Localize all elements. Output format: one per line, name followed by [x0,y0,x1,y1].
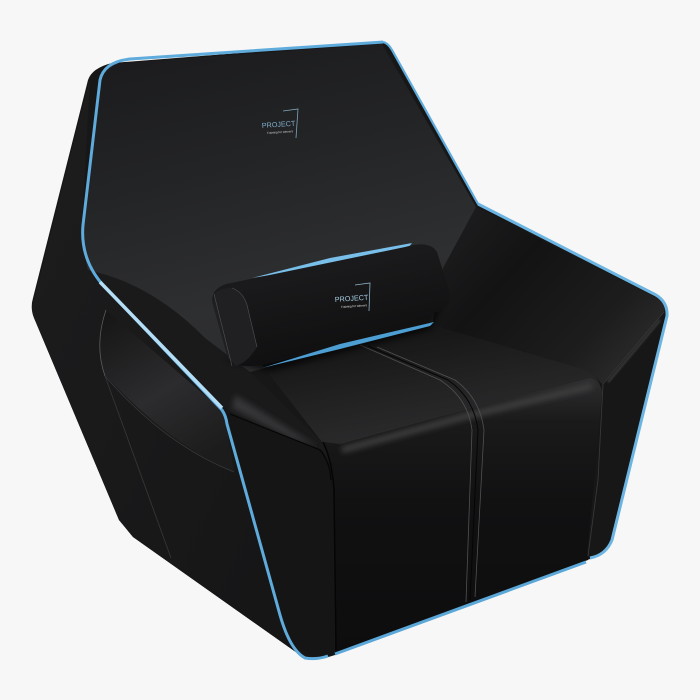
lumbar pillow [212,244,450,366]
blue piping: seat base [335,562,586,654]
blue piping: right arm and leg [478,204,667,558]
chair body silhouette [32,42,667,658]
seat front [324,378,602,653]
blue piping: back right edge [383,42,478,204]
left arm front [227,414,334,657]
logo tagline: Training for winners [267,129,294,135]
chair back panel [84,44,476,372]
logo wordmark: PROJECT [335,293,369,304]
right arm corner seam [588,312,664,556]
logo tagline: Training for winners [341,303,368,309]
logo bracket [283,109,298,138]
right arm front [587,310,665,557]
arm front seam [230,414,331,480]
left arm top [86,270,332,480]
outer left side panel [32,78,300,655]
pillow shadow [225,300,445,372]
pillow logo [335,283,370,311]
left arm outer bulge [100,310,234,472]
logo bracket [355,283,370,311]
logo wordmark: PROJECT [262,119,296,130]
highlight: left arm top [232,395,318,447]
piping highlight: left arm [100,282,222,408]
blue strip below pillow [262,322,434,368]
pillow end cap [213,288,257,366]
right arm top [432,207,665,384]
blue strip above pillow [252,243,412,278]
seat left seam [323,442,336,650]
seat top [262,325,600,446]
pillow cap stitch [214,288,257,366]
back logo [262,109,298,138]
side pocket lines [100,310,234,558]
right arm front highlight [608,320,660,382]
highlight: seat front edge [342,386,592,450]
blue piping: back and left side [83,42,383,659]
seat centre seam [368,346,478,600]
seat stitching [360,345,484,602]
